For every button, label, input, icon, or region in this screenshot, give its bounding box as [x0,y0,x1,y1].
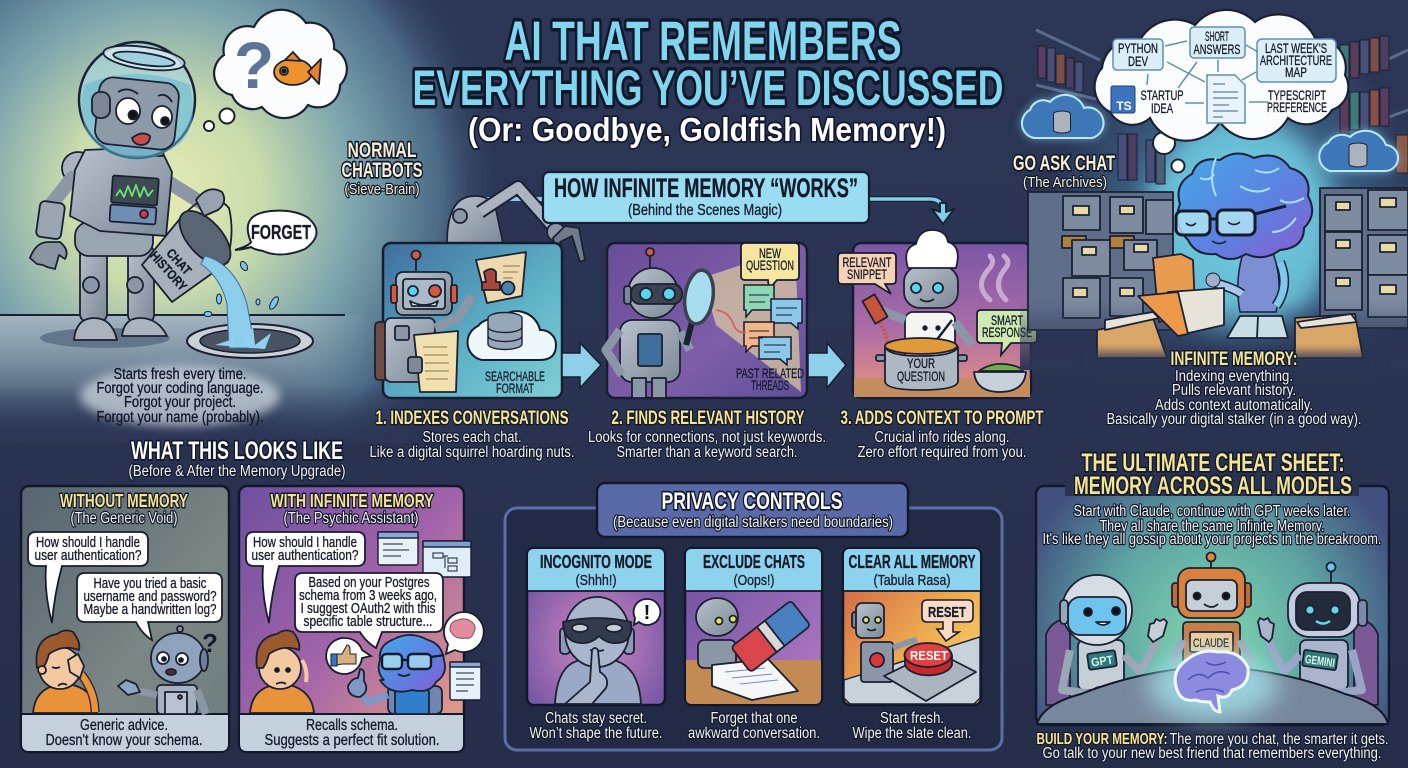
speech bubble: generic answer: Have you tried a basic [94,576,206,592]
icon: claude robot [1172,552,1252,666]
panel: step 3 adds context to prompt [838,230,1037,398]
panel: ultimate cheat sheet [1036,449,1389,725]
label: go ask chat: (The Archives) [1023,174,1107,191]
speech bubble: tailored answer: I suggest OAuth2 with this [300,601,436,617]
memory node: short answers [1190,27,1245,58]
card: incognito mode: (Shhh!) [576,572,616,589]
text: infinite memory summary [1106,349,1362,428]
icon: typescript file: TS [1116,99,1132,113]
thought bubble: question mark and goldfish: ? [234,28,274,102]
caption: Doesn't know your schema. [46,732,202,749]
memory node: python dev [1113,39,1163,70]
text: infinite memory summary: INFINITE MEMORY: [1170,349,1298,370]
icon: smart response bubble [977,310,1037,355]
text: step 2 caption [588,408,826,461]
heading: what this looks like: (Before & After the Memory Upgrade) [128,463,346,480]
label: normal chatbots: CHATBOTS [342,159,422,182]
card: incognito mode [527,548,665,705]
arrow: step 2 to step 3 [808,343,846,388]
icon: chat history bucket [142,189,240,302]
icon: brain robot assistant [348,635,445,714]
icon: detective robot with magnifier [606,248,717,398]
icon: past thread bubbles [716,285,802,365]
arrow: header to step 3 [870,199,954,224]
title [60,491,188,527]
icon: reset button [884,643,976,701]
icon: frustrated person [33,630,97,713]
text: build your memory [1036,731,1388,762]
card: exclude chats: (Oops!) [734,572,774,589]
card captions: Wipe the slate clean. [852,725,972,742]
card: exclude chats: EXCLUDE CHATS [703,552,805,572]
icon: gemini robot: GEMINI [1304,652,1336,670]
speech bubble: user question: How should I handle [36,535,140,551]
heading: what this looks like: WHAT THIS LOOKS LIKE [131,437,343,465]
icon: glowing cloud database right [1319,131,1398,171]
memory node: typescript preference: TYPESCRIPT [1268,88,1326,103]
caption: Recalls schema. [306,717,398,734]
main title: EVERYTHING YOU’VE DISCUSSED [412,60,1004,116]
icon: relevant snippet bubble: SNIPPET [847,267,887,282]
memory node: startup idea [1140,88,1184,116]
icon: robotic arm [447,187,585,262]
thought bubble: question mark and goldfish [204,10,347,131]
speech bubble: user question [246,532,365,623]
speech bubble: generic answer [77,573,222,640]
icon: confused robot [118,626,218,714]
page background [0,0,493,436]
icon: finished bowl [974,364,1026,392]
memory node: architecture map: MAP [1285,65,1307,80]
main title: AI THAT REMEMBERS [504,9,902,72]
library background [1000,0,1408,370]
icon: smart response bubble: RESPONSE [982,325,1032,340]
card: incognito mode: INCOGNITO MODE [540,552,652,572]
card captions: awkward conversation. [688,725,820,742]
heading: what this looks like [128,437,346,480]
speech bubble: tailored answer: Based on your Postgres [308,575,430,591]
card captions: Won’t shape the future. [530,725,662,742]
icon: goldfish [274,52,321,85]
text: step 3 caption: 3. ADDS CONTEXT TO PROMPT [840,408,1044,429]
icon: masked robot shushing [555,597,641,704]
card: clear all memory: CLEAR ALL MEMORY [848,552,976,572]
icon: central document [1207,75,1245,123]
icons: recalled schema documents [378,532,471,577]
text: step 2 caption: 2. FINDS RELEVANT HISTORY [612,408,805,429]
speech bubble: reset [922,600,973,641]
privacy header: (Because even digital stalkers need boundaries) [613,514,893,531]
text: intro: Start with Claude, continue with GPT weeks later. [1074,503,1350,520]
panel: with infinite memory [239,486,484,752]
privacy header [597,483,908,537]
card captions: Start fresh. [880,710,944,727]
caption: Suggests a perfect fit solution. [264,732,440,749]
text: chatbot failings: Forgot your coding language. [96,380,264,397]
header: how infinite memory works: HOW INFINITE MEMORY “WORKS” [554,173,858,203]
icon: claude robot: CLAUDE [1193,636,1229,650]
card captions: Chats stay secret. [545,710,647,727]
speech bubble: user question: user authentication? [34,548,142,564]
text: infinite memory summary: Pulls relevant history. [1172,382,1296,399]
title [270,491,434,527]
memory node: startup idea: STARTUP [1140,88,1184,103]
icon: forgetful robot with fishbowl [30,41,205,348]
text: build your memory: BUILD YOUR MEMORY: [1036,731,1168,748]
icon: reset button: RESET [910,648,948,663]
text: step 3 caption: Zero effort required from you. [858,444,1026,461]
memory node: typescript preference [1267,88,1327,115]
icon: chat history bucket: HISTORY [147,248,190,294]
panel: normal chatbot illustration [30,10,347,426]
title: (The Generic Void) [70,510,178,527]
icon: happy robot with scroll [375,250,472,392]
privacy header: PRIVACY CONTROLS [662,488,842,515]
icon: searchable cloud database: FORMAT [496,381,534,396]
icon: thumbs up bubble [326,638,371,674]
header: how infinite memory works: (Behind the Scenes Magic) [628,202,782,219]
icon: relevant snippet bubble: RELEVANT [842,255,892,270]
icon: exclamation bubble: ! [644,602,650,624]
speech bubble: forget [235,211,317,255]
label: past related threads: PAST RELATED [736,366,804,381]
label: normal chatbots [342,139,422,198]
icon: chef robot with pot: YOUR [907,356,935,371]
icon: relevant snippet bubble [838,253,896,294]
memory node: short answers: ANSWERS [1194,42,1240,57]
speech bubble: tailored answer [295,573,443,648]
text: infinite memory summary: Adds context automatically. [1155,397,1313,414]
text: step 3 caption [840,408,1044,461]
label: go ask chat [1013,152,1115,191]
icon: robot with eraser [696,598,811,700]
text: intro [1042,503,1382,548]
memory node: startup idea: IDEA [1151,101,1173,116]
title: WITH INFINITE MEMORY [270,491,434,511]
text: infinite memory summary: Basically your digital stalker (in a good way). [1106,411,1362,428]
arrow: step 1 to step 2 [562,343,601,388]
icon: smart response bubble: SMART [991,313,1023,328]
thought bubble: connected memories [1095,10,1348,172]
text: step 1 caption [370,408,574,461]
icon: typescript file [1111,86,1135,113]
icon: gpt robot: GPT [1090,652,1115,669]
speech bubble: generic answer: Maybe a handwritten log? [84,602,216,618]
label: past related threads: THREADS [751,378,789,393]
text: chatbot failings [80,366,280,426]
label: normal chatbots: (Sieve-Brain) [344,181,420,198]
memory node: python dev: PYTHON [1118,41,1158,56]
filing cabinets [1028,188,1408,330]
memory node: architecture map: ARCHITECTURE [1260,53,1332,68]
icon: brain idea bubble [444,612,484,654]
text: step 3 caption: Crucial info rides along. [874,429,1010,446]
icon: water pouring into drain [187,256,313,358]
speech bubble: user question: user authentication? [252,548,358,564]
icon: chef robot with pot [862,230,972,390]
icon: searchable cloud database: SEARCHABLE [485,369,545,384]
label: normal chatbots: NORMAL [348,139,417,162]
memory node: python dev: DEV [1128,54,1148,69]
caption [264,717,440,749]
speech bubble: user question [28,532,148,623]
icon: folders and open book [1097,254,1363,358]
icon: robot pressing reset [852,603,917,682]
icon: confused robot: ? [202,628,218,658]
speech bubble: tailored answer: specific table structure... [304,614,432,630]
icon: stamped document [476,252,526,303]
text: intro: They all share the same Infinite Memory. [1100,518,1324,535]
speech bubble: tailored answer: schema from 3 weeks ago, [299,588,437,604]
label: go ask chat: GO ASK CHAT [1013,152,1115,175]
text: step 1 caption: Like a digital squirrel hoarding nuts. [370,444,574,461]
panel: privacy controls [505,483,1002,750]
text: infinite memory summary: Indexing everything. [1175,368,1293,385]
label: past related threads [736,366,804,393]
connecting arrows [1147,41,1268,103]
panel: without memory [21,486,229,752]
text: chatbot failings: Starts fresh every time. [114,366,246,383]
icon: chat history bucket: CHAT [163,245,195,278]
icon: new question note [741,243,799,289]
conference table [1037,651,1388,724]
icon: new question note: QUESTION [746,258,794,273]
card: clear all memory: (Tabula Rasa) [874,572,950,589]
icon: new question note: NEW [759,246,781,261]
panel: go ask chat archive illustration [1000,0,1408,377]
icon: exclamation bubble [634,599,660,625]
icon: recalled list document [450,662,481,700]
text: step 2 caption: Smarter than a keyword search. [616,444,798,461]
icon: gpt robot [1046,575,1167,705]
title: (The Psychic Assistant) [284,510,418,527]
text: chatbot failings: Forgot your name (probably). [96,409,264,426]
icon: brain librarian with glasses [1176,153,1312,312]
speech bubble: generic answer: username and password? [84,589,216,605]
panel: step 1 indexes conversations [375,243,562,398]
card: exclude chats [685,548,822,705]
caption [46,717,202,749]
icon: searchable cloud database [468,311,556,396]
icon: shared glowing brain [1175,651,1248,712]
text: step 2 caption: Looks for connections, not just keywords. [588,429,826,446]
speech bubble: forget: FORGET [251,222,311,244]
main title [412,9,1004,148]
panel: step 2 finds relevant history [606,243,807,398]
memory node: short answers: SHORT [1205,29,1229,44]
memory node: architecture map: LAST WEEK'S [1265,41,1327,56]
icon: chef robot with pot: QUESTION [897,369,945,384]
text: step 1 caption: 1. INDEXES CONVERSATIONS [376,408,568,429]
icon: impressed person [250,630,314,713]
caption: Generic advice. [80,717,168,734]
text: chatbot failings: Forgot your project. [124,394,236,411]
card captions [530,710,972,742]
icon: gemini robot [1258,562,1378,705]
header: how infinite memory works [543,172,869,223]
connector: header to step 1 [472,199,543,243]
text: step 1 caption: Stores each chat. [422,429,522,446]
card: clear all memory [843,548,981,705]
speech bubble: reset: RESET [928,604,966,621]
heading [1065,449,1359,500]
icon: glowing cloud database left [1022,95,1104,138]
main title: (Or: Goodbye, Goldfish Memory!) [468,111,946,148]
speech bubble: user question: How should I handle [253,535,357,551]
card captions: Forget that one [710,710,798,727]
memory node: typescript preference: PREFERENCE [1267,100,1327,115]
title: WITHOUT MEMORY [60,491,188,511]
memory node: architecture map [1257,39,1336,82]
